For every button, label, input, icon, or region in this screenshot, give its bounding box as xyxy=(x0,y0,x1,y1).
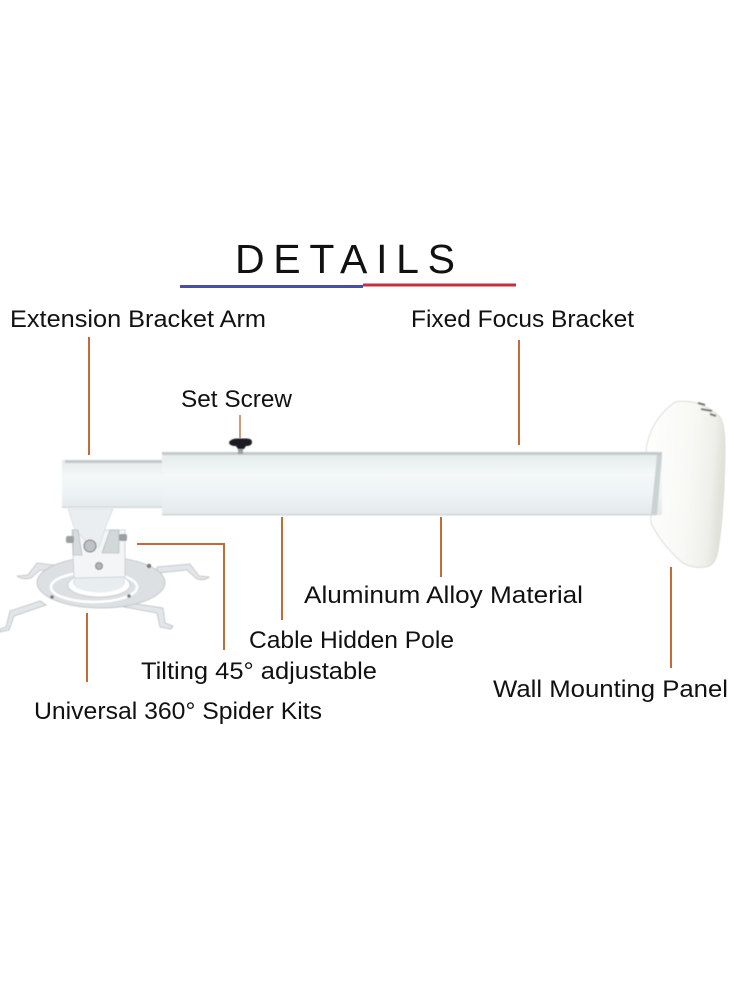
product: projector wall mount xyxy=(0,401,725,632)
leader lines xyxy=(87,337,671,682)
leader: spider kits xyxy=(86,613,88,682)
set screw knob xyxy=(229,438,252,454)
label: set screw: Set Screw xyxy=(181,386,293,413)
leader: set screw xyxy=(239,415,241,438)
spider kit mount plate xyxy=(0,557,209,632)
label: extension bracket arm: Extension Bracket Arm xyxy=(10,306,266,333)
inner extension arm xyxy=(62,460,163,508)
leader: wall mounting panel xyxy=(670,567,672,668)
label: fixed focus bracket: Fixed Focus Bracket xyxy=(411,306,634,333)
label: aluminum alloy material: Aluminum Alloy Material xyxy=(304,582,583,609)
title: DETAILS xyxy=(235,236,455,282)
label: wall mounting panel: Wall Mounting Panel xyxy=(493,676,728,703)
wall mounting panel xyxy=(646,401,725,568)
tilt head bracket xyxy=(66,509,127,592)
label: cable hidden pole: Cable Hidden Pole xyxy=(249,627,454,654)
leader: cable hidden pole xyxy=(281,517,283,620)
label: tilting adjustable: Tilting 45° adjustable xyxy=(141,658,377,685)
title underline xyxy=(180,284,516,288)
label: universal spider kits: Universal 360° Spider Kits xyxy=(34,698,322,725)
outer fixed focus tube xyxy=(162,452,662,516)
leader: aluminum alloy material xyxy=(440,517,442,577)
leader: fixed focus bracket xyxy=(518,340,520,445)
leader: tilting adjustable xyxy=(137,544,224,650)
leader: extension bracket arm xyxy=(88,337,90,455)
